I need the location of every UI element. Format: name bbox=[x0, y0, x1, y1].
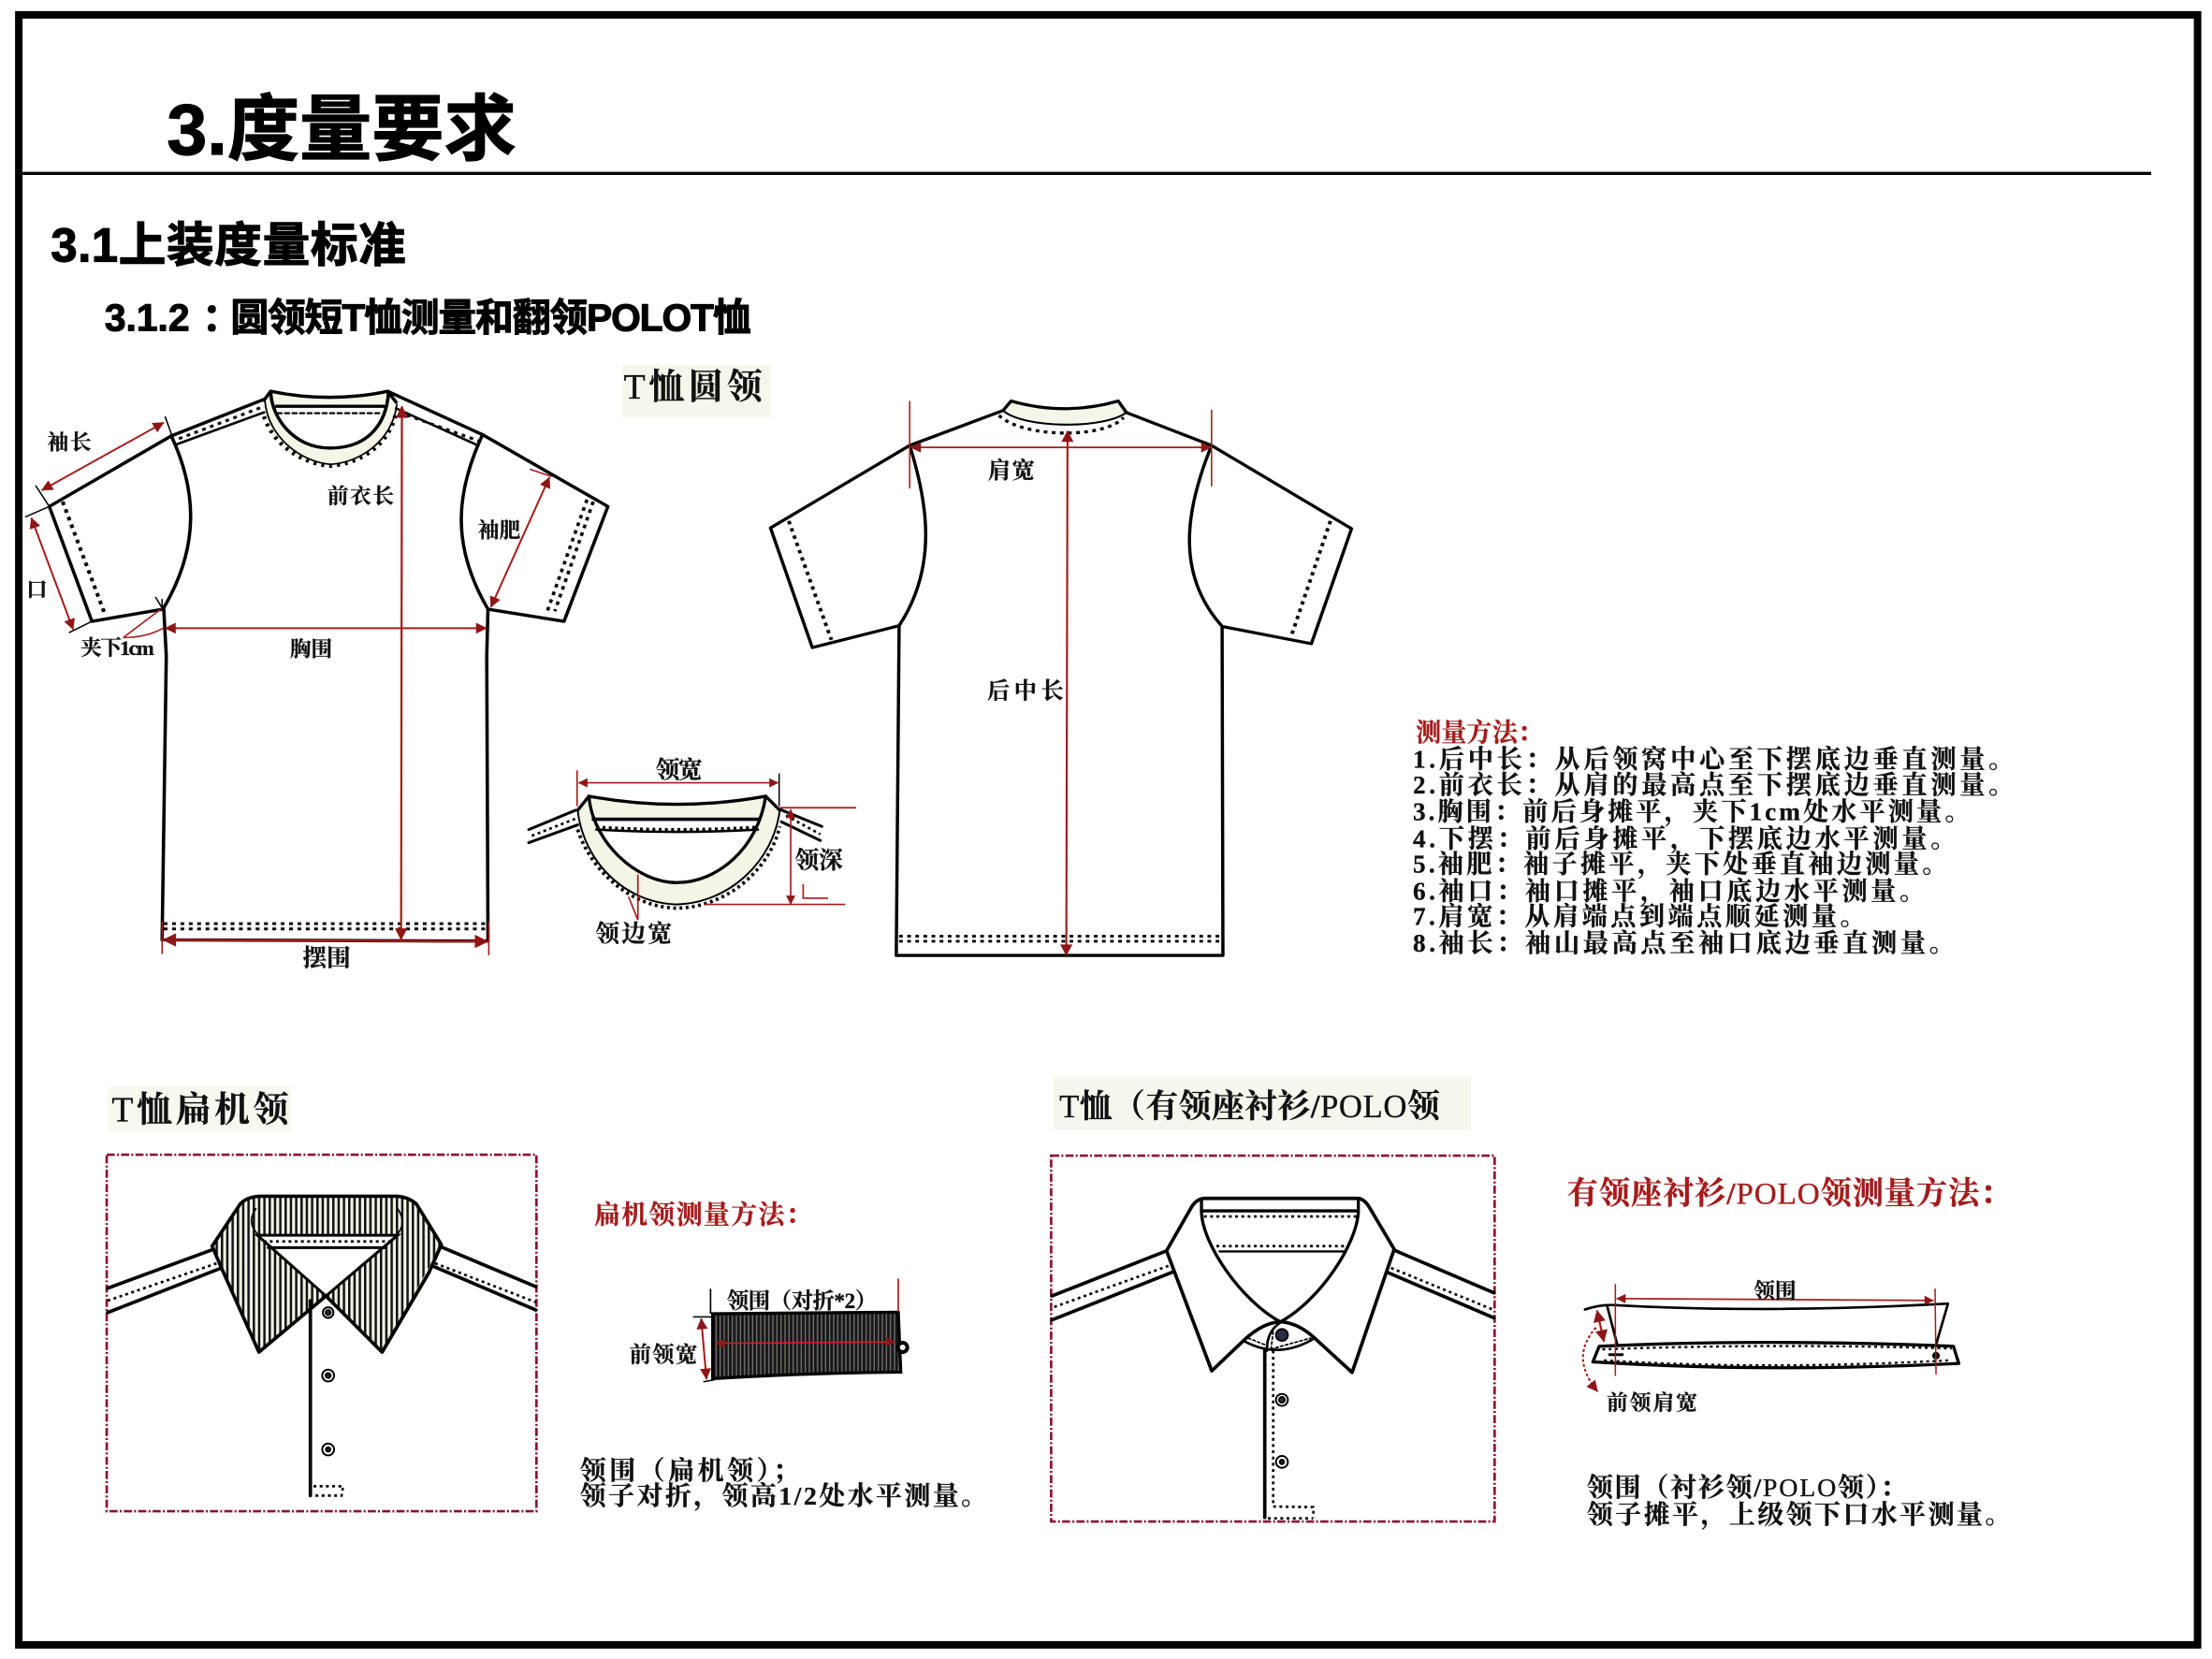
measurement: collar length bbox=[1615, 1284, 1936, 1375]
label: collar fold: 领围（对折*2） bbox=[727, 1288, 877, 1314]
panel: shirt collar bbox=[1051, 1156, 1494, 1521]
method line 7: 7.肩宽：从肩端点到端点顺延测量。 bbox=[1413, 902, 1866, 931]
diagram: neck detail bbox=[529, 756, 856, 948]
method line 8: 8.袖长：袖山最高点至袖口底边垂直测量。 bbox=[1413, 928, 1955, 957]
measurement: shoulder width bbox=[910, 401, 1212, 488]
method line 3: 3.胸围：前后身摊平，夹下1cm处水平测量。 bbox=[1413, 798, 1971, 827]
label: neck width: 领宽 bbox=[656, 756, 703, 783]
collar strip bbox=[713, 1312, 901, 1378]
flat knit method heading: 扁机领测量方法： bbox=[594, 1200, 812, 1230]
flat knit line 2: 领子对折，领高1/2处水平测量。 bbox=[580, 1481, 987, 1511]
flat knit line 1: 领围（扁机领）； bbox=[580, 1456, 799, 1486]
measurement: neck depth bbox=[705, 808, 856, 905]
label: shirt collar tee bbox=[1054, 1076, 1471, 1130]
measurement: collar length bbox=[710, 1278, 898, 1344]
diagram: shirt collar flat bbox=[1583, 1280, 1958, 1415]
neck ring bbox=[577, 796, 779, 909]
pointer arrow bbox=[1583, 1328, 1597, 1391]
diagram: back tee bbox=[770, 401, 1351, 955]
collar band bbox=[1593, 1343, 1958, 1368]
sub heading 3.1.2: ： bbox=[202, 297, 240, 340]
shirt collar method heading: 有领座衬衫/POLO领测量方法： bbox=[1567, 1176, 2011, 1211]
label: 1cm under arm: 夹下1cm bbox=[80, 636, 154, 660]
label: back length: 后中长 bbox=[987, 679, 1064, 705]
method line 5: 5.袖肥：袖子摊平，夹下处垂直袖边测量。 bbox=[1413, 851, 1947, 880]
measurement: neck width bbox=[577, 770, 779, 807]
neck shoulder stubs bbox=[529, 809, 822, 843]
section heading 3.1: 3.1上装度量标准 bbox=[51, 219, 406, 272]
method line 2: 2.前衣长：从肩的最高点至下摆底边垂直测量。 bbox=[1413, 770, 2014, 799]
measuring method text bbox=[1413, 719, 2014, 957]
panel frame bbox=[1051, 1156, 1494, 1521]
method line 6: 6.袖口：袖口摊平，袖口底边水平测量。 bbox=[1413, 877, 1925, 906]
buttons bbox=[322, 1307, 334, 1455]
measurement: band width bbox=[1597, 1310, 1604, 1342]
label: cuff: 口 bbox=[26, 578, 48, 602]
diagram: front tee bbox=[25, 391, 608, 971]
back tee collar bbox=[999, 401, 1127, 433]
buttons bbox=[1276, 1329, 1288, 1468]
front tee right sleeve bbox=[461, 435, 608, 621]
label: collar circumference: 领围 bbox=[1754, 1280, 1797, 1303]
shoulder seams bbox=[1052, 1250, 1494, 1320]
label: shoulder width: 肩宽 bbox=[988, 458, 1035, 484]
placket bbox=[311, 1301, 343, 1495]
header rule bbox=[22, 172, 2151, 175]
back tee sleeves and shoulders bbox=[770, 411, 1351, 648]
method line 4: 4.下摆：前后身摊平，下摆底边水平测量。 bbox=[1413, 823, 1956, 853]
label: chest: 胸围 bbox=[290, 637, 332, 661]
measurement: sleeve width bbox=[491, 469, 551, 607]
label: flat knit collar tee: T恤扁机领 bbox=[111, 1091, 291, 1130]
shirt collar line 1: 领围（衬衫领/POLO领）： bbox=[1587, 1473, 1907, 1503]
measurement: front length bbox=[399, 406, 404, 939]
flat knit method text bbox=[580, 1456, 987, 1511]
measurement: hem bbox=[162, 922, 488, 955]
sub heading 3.1.2: 圆领短T恤测量和翻领POLOT恤 bbox=[230, 297, 751, 340]
front tee shoulders bbox=[171, 391, 483, 445]
measurement: chest bbox=[165, 626, 487, 631]
label: front collar width: 前领肩宽 bbox=[1607, 1391, 1697, 1415]
shirt collar outline bbox=[1167, 1199, 1394, 1373]
label: front collar width: 前领宽 bbox=[630, 1342, 697, 1368]
placket bbox=[1265, 1350, 1314, 1519]
striped collar bbox=[212, 1196, 442, 1352]
label: neck depth: 领深 bbox=[794, 847, 843, 874]
shirt collar line 2: 领子摊平，上级领下口水平测量。 bbox=[1587, 1500, 2011, 1530]
measurement: cuff bbox=[25, 506, 92, 633]
label: shirt collar tee: T恤（有领座衬衫/POLO领 bbox=[1059, 1088, 1442, 1125]
label: round neck tee: T恤圆领 bbox=[624, 368, 764, 407]
back tee body bbox=[896, 626, 1223, 955]
label: sleeve length: 袖长 bbox=[48, 431, 92, 455]
measurement: back length bbox=[1067, 431, 1068, 955]
diagram: flat knit collar strip bbox=[630, 1278, 908, 1382]
front tee collar bbox=[264, 391, 397, 466]
title: 3.度量要求 bbox=[167, 90, 517, 170]
method heading: 测量方法： bbox=[1416, 719, 1543, 747]
front tee body bbox=[162, 609, 488, 941]
measurement: 1cm under arm bbox=[124, 597, 163, 637]
collar stand bbox=[1244, 1322, 1315, 1350]
front tee left sleeve bbox=[50, 436, 191, 621]
label: neck rib width: 领边宽 bbox=[595, 921, 672, 948]
panel frame bbox=[107, 1155, 536, 1511]
shirt collar method text bbox=[1587, 1473, 2011, 1530]
method line 1: 1.后中长：从后领窝中心至下摆底边垂直测量。 bbox=[1413, 745, 2014, 774]
strip button bbox=[898, 1343, 908, 1352]
sub heading 3.1.2: 3.1.2 bbox=[105, 297, 190, 340]
measurement: neck rib leader bbox=[629, 875, 638, 920]
shoulder seams bbox=[108, 1247, 536, 1313]
panel: flat knit collar bbox=[107, 1155, 536, 1511]
label: hem: 摆围 bbox=[302, 944, 351, 971]
measurement: sleeve length bbox=[36, 416, 172, 506]
measurement: front collar width bbox=[693, 1317, 714, 1382]
label: sleeve width: 袖肥 bbox=[478, 518, 521, 542]
label: front length: 前衣长 bbox=[327, 485, 394, 508]
upper collar bbox=[1585, 1303, 1948, 1345]
